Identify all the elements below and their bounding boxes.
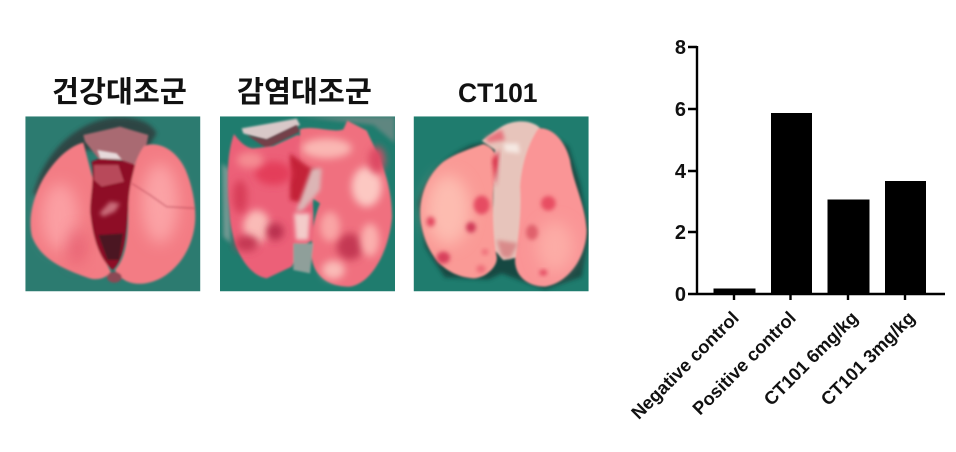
photo: healthy lung xyxy=(25,116,200,291)
heading: healthy control: 건강대조군 xyxy=(52,76,187,109)
axes xyxy=(688,46,945,300)
y axis labels: 8 xyxy=(675,37,686,59)
x axis labels: CT101 6mg/kg xyxy=(759,307,862,409)
photo: CT101 lung xyxy=(414,116,589,291)
x axis labels: Positive control xyxy=(688,307,800,419)
x axis labels: Negative control xyxy=(627,307,743,423)
y axis labels xyxy=(675,37,687,306)
bar chart xyxy=(627,37,945,423)
heading: CT101: CT101 xyxy=(458,78,538,108)
y axis labels: 4 xyxy=(675,161,687,183)
y axis labels: 6 xyxy=(675,99,686,121)
y axis labels: 2 xyxy=(675,222,686,244)
bars xyxy=(714,113,926,294)
x axis labels xyxy=(627,307,919,423)
y axis labels: 0 xyxy=(675,284,686,306)
heading: infected control: 감염대조군 xyxy=(237,76,372,109)
photo: infected lung xyxy=(220,116,395,291)
x axis labels: CT101 3mg/kg xyxy=(816,307,919,409)
